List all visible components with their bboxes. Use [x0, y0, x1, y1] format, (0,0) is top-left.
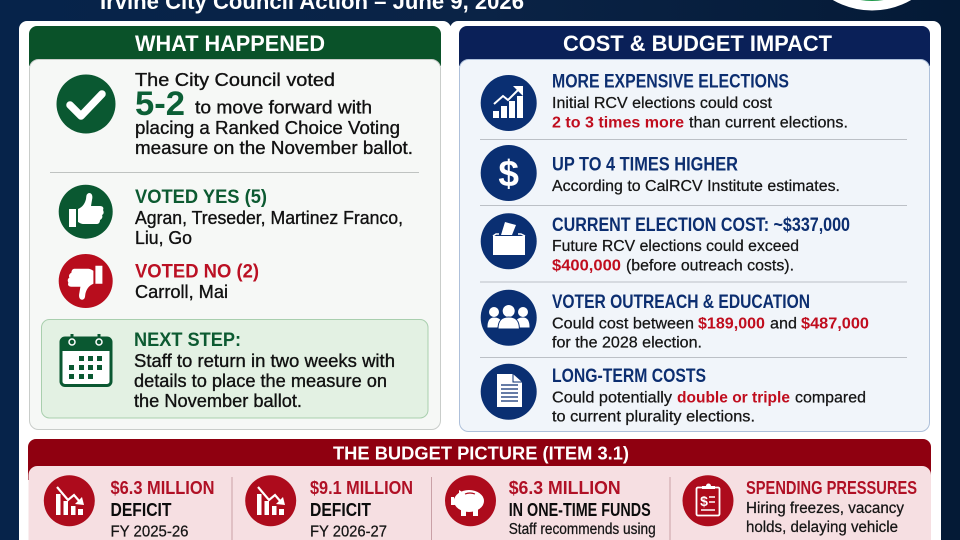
next step text [134, 330, 395, 411]
voted yes text: VOTED YES (5) [135, 187, 267, 208]
icon: dollar sign: $ [498, 153, 519, 194]
item: spending pressures: Hiring freezes, vacancy [746, 500, 904, 517]
next step text: the November ballot. [134, 391, 302, 411]
item: spending pressures: holds, delaying vehicle [746, 519, 898, 536]
panel: cost and budget impact [459, 26, 930, 432]
item: long-term costs: LONG-TERM COSTS [552, 366, 706, 387]
vote summary text: The City Council voted [135, 70, 335, 90]
heading: what happened [29, 26, 441, 66]
icon: group of people [481, 290, 537, 346]
item: fy 2026-27 deficit: DEFICIT [310, 500, 371, 520]
next step text: NEXT STEP: [134, 330, 241, 351]
voted no text: VOTED NO (2) [135, 262, 259, 283]
item: voter outreach and education: $487,000 [801, 316, 869, 333]
cost body background [460, 60, 930, 432]
heading: what happened: WHAT HAPPENED [135, 31, 325, 56]
item: voter outreach and education: for the 2028 election. [552, 334, 702, 351]
item: current election cost: $400,000 [552, 258, 621, 275]
icon: clipboard: $ [700, 493, 708, 509]
what happened body background [30, 60, 440, 430]
item: current election cost: CURRENT ELECTION COST: ~$337,000 [552, 215, 850, 236]
icon: falling chart [245, 475, 296, 526]
item: fy 2025-26 deficit: DEFICIT [110, 500, 172, 520]
item: up to 4 times higher [481, 145, 840, 201]
heading: budget picture: THE BUDGET PICTURE (ITEM 3.1) [333, 444, 629, 464]
item: current election cost: (before outreach costs). [626, 258, 794, 275]
item: one-time funds: Staff recommends using [509, 521, 656, 538]
vote summary text: placing a Ranked Choice Voting [135, 118, 400, 138]
panel: what happened [29, 26, 441, 430]
voted yes text: Liu, Go [135, 228, 192, 248]
voted no text: Carroll, Mai [135, 282, 228, 302]
logo badge [794, 0, 950, 10]
heading: cost and budget impact [459, 26, 930, 66]
heading: cost and budget impact: COST & BUDGET IMPACT [563, 31, 833, 56]
item: one-time funds [445, 475, 656, 538]
voted yes text: Agran, Treseder, Martinez Franco, [135, 208, 403, 228]
item: voter outreach and education: $189,000 [698, 316, 765, 333]
item: more expensive elections: Initial RCV elections could cost [552, 95, 773, 112]
icon: falling chart [44, 475, 95, 526]
icon: rising chart [481, 75, 537, 131]
icon: document [481, 364, 537, 420]
icon: thumbs up [59, 185, 113, 239]
callout: next step [42, 320, 428, 418]
budget body background [28, 466, 931, 540]
icon: thumbs down [59, 254, 113, 308]
item: more expensive elections: 2 to 3 times more [552, 114, 684, 132]
voted yes text [135, 187, 403, 248]
item: voter outreach and education [481, 290, 869, 351]
item: fy 2026-27 deficit [245, 475, 413, 540]
icon: check mark [56, 74, 116, 134]
icon: clipboard [682, 475, 734, 526]
item: up to 4 times higher: According to CalRCV Institute estimates. [552, 178, 840, 195]
item: up to 4 times higher: UP TO 4 TIMES HIGHER [552, 155, 738, 176]
item: more expensive elections: MORE EXPENSIVE ELECTIONS [552, 72, 789, 92]
item: long-term costs: Could potentially [552, 390, 672, 407]
item: spending pressures [682, 475, 917, 536]
item: long-term costs: double or triple [677, 390, 790, 407]
item: voter outreach and education: Could cost between [552, 316, 694, 333]
panel: the budget picture [28, 439, 931, 540]
vote summary text: to move forward with [195, 98, 372, 118]
icon: dollar sign [481, 145, 537, 201]
item: one-time funds: $6.3 MILLION [509, 478, 621, 498]
next step text: Staff to return in two weeks with [134, 351, 395, 371]
icon: calendar [61, 334, 111, 386]
item: long-term costs: to current plurality elections. [552, 409, 755, 426]
vote summary text: 5-2 [135, 85, 185, 123]
item: one-time funds: IN ONE-TIME FUNDS [509, 500, 651, 520]
item: spending pressures: SPENDING PRESSURES [746, 478, 917, 498]
item: voter outreach and education: and [770, 316, 797, 333]
item: fy 2026-27 deficit: $9.1 MILLION [310, 478, 413, 498]
item: long-term costs: compared [795, 390, 866, 407]
icon: piggy bank [445, 475, 496, 526]
vote summary text [135, 70, 413, 158]
item: long-term costs [481, 364, 866, 426]
item: more expensive elections [481, 72, 848, 132]
voted no text [135, 262, 259, 302]
item: fy 2025-26 deficit: $6.3 MILLION [110, 478, 214, 498]
vote summary text: measure on the November ballot. [135, 138, 413, 158]
next step text: details to place the measure on [134, 371, 387, 391]
item: current election cost: Future RCV elections could exceed [552, 238, 799, 255]
item: current election cost [481, 213, 850, 275]
item: voter outreach and education: VOTER OUTREACH & EDUCATION [552, 292, 810, 313]
heading: budget picture [28, 439, 931, 480]
icon: ballot box [481, 213, 537, 269]
item: fy 2025-26 deficit [44, 475, 214, 540]
item: more expensive elections: than current elections. [689, 114, 848, 132]
